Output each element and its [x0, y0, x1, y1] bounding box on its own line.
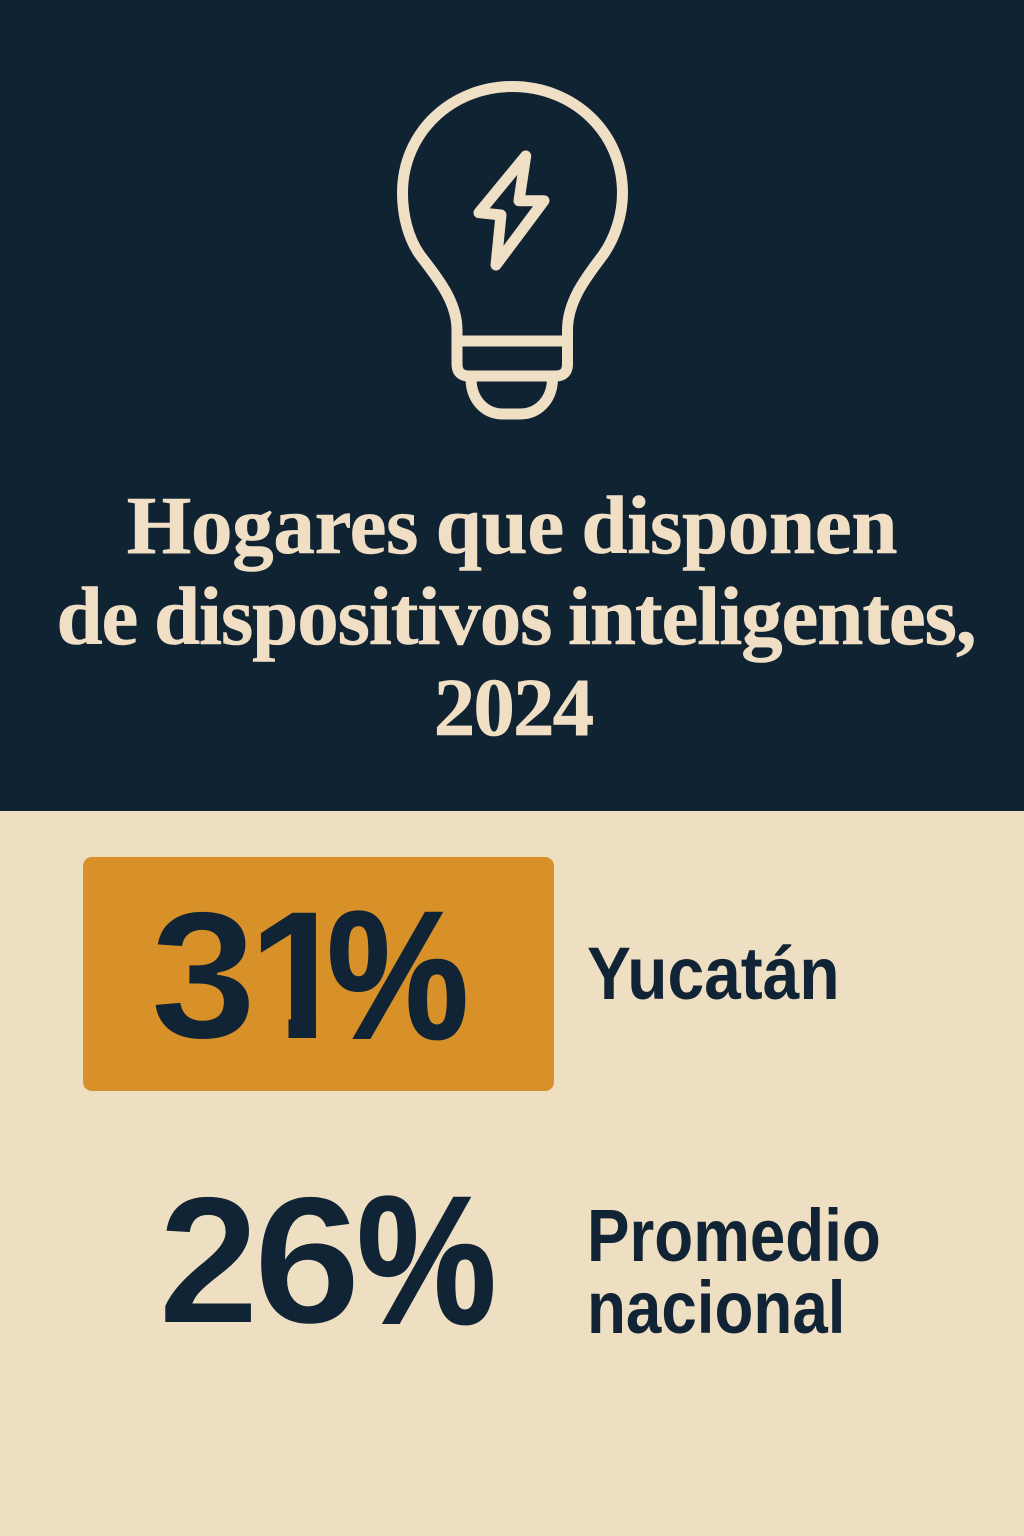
number: 31%: %	[327, 873, 469, 1077]
number: 26%	[158, 1158, 496, 1362]
card: Yucatán highlight	[83, 857, 554, 1091]
number: 31%	[150, 873, 469, 1077]
heading: title: de dispositivos inteligentes,	[56, 570, 976, 662]
heading: title: Hogares que disponen	[127, 479, 897, 571]
label: Promedio nacional	[587, 1194, 881, 1349]
number: 26%: 6	[253, 1158, 361, 1362]
number: 31%: 1	[248, 873, 350, 1077]
heading: title: 2024	[434, 661, 592, 753]
number: 26%: 2	[158, 1158, 259, 1362]
number: 31%: 3	[150, 873, 257, 1077]
panel: header	[0, 0, 1024, 811]
label: Promedio nacional: Promedio	[587, 1194, 881, 1277]
label: Promedio nacional: nacional	[587, 1266, 845, 1349]
icon: light bulb	[397, 81, 628, 420]
label: Yucatán: Yucatán	[587, 932, 840, 1015]
panel: statistics	[83, 857, 878, 1334]
heading: title	[56, 479, 976, 753]
number: 26%: %	[357, 1158, 496, 1362]
